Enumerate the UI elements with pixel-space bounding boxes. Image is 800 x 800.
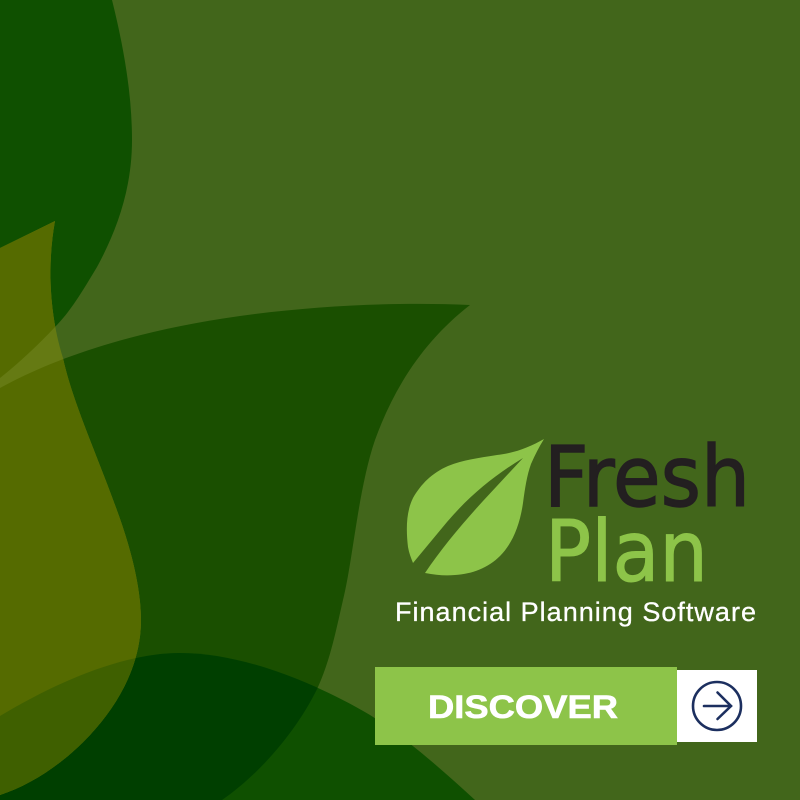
olive overlap: bottom leaf xyxy=(0,658,136,795)
olive overlap: top left leaf xyxy=(0,221,56,378)
button background xyxy=(375,667,677,745)
leaf shape: olive left xyxy=(0,221,141,795)
icon: logo leaf xyxy=(407,439,544,575)
olive overlap: centre leaf xyxy=(0,359,141,795)
leaf shape: bottom xyxy=(0,653,475,800)
icon: arrow xyxy=(704,692,731,719)
arrow button xyxy=(677,670,757,742)
leaf shape: large centre xyxy=(0,304,470,800)
wordmark: Plan: Plan xyxy=(545,503,708,602)
button label: DISCOVER xyxy=(428,689,618,725)
leaf shape: top left xyxy=(0,0,132,378)
arrow button background xyxy=(677,670,757,742)
tagline: Financial Planning Software xyxy=(395,597,756,627)
button: discover xyxy=(375,667,677,745)
wordmark: Fresh: Fresh xyxy=(544,428,750,526)
logo xyxy=(407,428,750,602)
leaf overlap: bottom and centre xyxy=(0,653,318,800)
icon: arrow circle xyxy=(693,682,741,730)
